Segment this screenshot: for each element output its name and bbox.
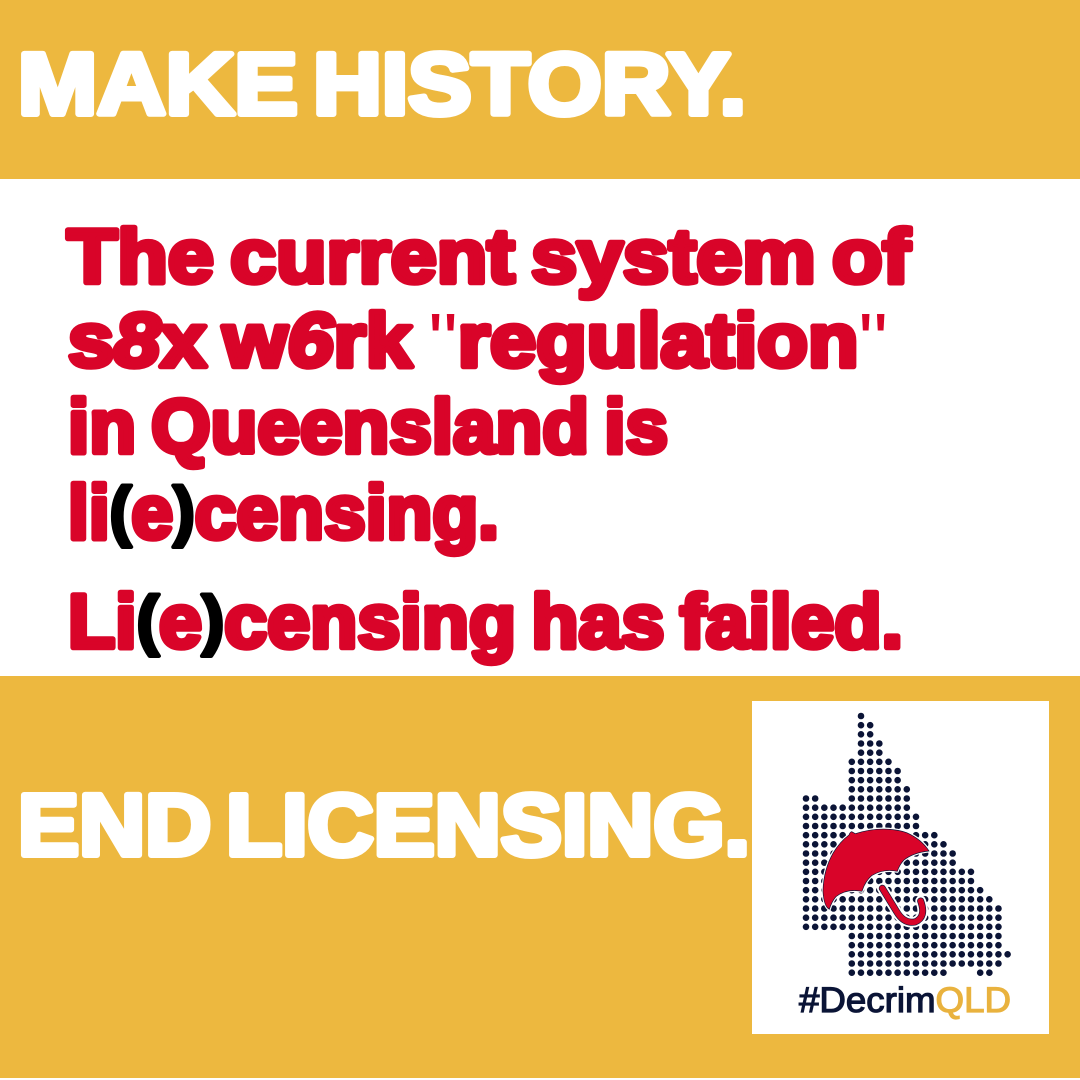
body statement: licensing has failed: Li bbox=[68, 580, 136, 664]
body statement: licensing has failed: ( bbox=[137, 582, 159, 656]
icon: dotted map of Queensland bbox=[806, 716, 1008, 973]
body statement: current system: ) bbox=[173, 474, 195, 548]
body statement: current system: ( bbox=[110, 474, 131, 548]
top gold band bbox=[0, 0, 1080, 179]
body statement: licensing has failed: ) bbox=[202, 582, 224, 656]
bottom gold band bbox=[0, 676, 1080, 1078]
icon: red umbrella bbox=[823, 829, 929, 922]
body statement: current system: s8x w6rk "regulation " bbox=[68, 298, 888, 384]
heading: make history: MAKE HISTORY. bbox=[18, 36, 746, 133]
body statement: current system: The current system of bbox=[67, 214, 911, 300]
heading: end licensing: END LICENSING. bbox=[18, 777, 750, 874]
body statement: current system bbox=[67, 214, 911, 556]
body statement: current system: censing. bbox=[195, 470, 499, 556]
logo panel bbox=[752, 701, 1049, 1034]
body statement: current system: li bbox=[68, 470, 110, 556]
logo hashtag: #DecrimQLD bbox=[799, 981, 1011, 1020]
body statement: current system: e bbox=[131, 470, 173, 556]
body statement: current system: in Queensland is bbox=[68, 384, 668, 470]
body statement: licensing has failed: e bbox=[159, 580, 202, 664]
body statement: licensing has failed: censing has failed. bbox=[224, 580, 903, 664]
